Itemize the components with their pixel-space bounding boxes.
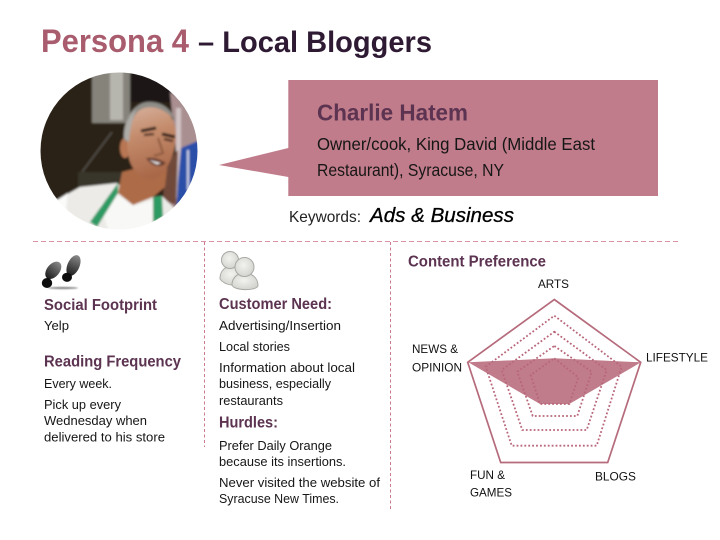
data shape	[468, 358, 641, 404]
keywords: Ads & Business	[369, 205, 514, 227]
radar axis labels: FUN &	[470, 468, 505, 482]
persona role: Restaurant), Syracuse, NY	[317, 160, 504, 180]
persona role: Owner/cook, King David (Middle East	[317, 134, 595, 154]
panel: customer need and hurdles	[219, 296, 380, 506]
heading: customer need: Customer Need:	[219, 296, 332, 313]
heading: reading frequency: Reading Frequency	[44, 354, 181, 370]
text: reading frequency details: delivered to his store	[44, 430, 165, 444]
ear	[120, 138, 130, 158]
text: hurdles list: Never visited the website of	[219, 475, 380, 490]
title: – Local Bloggers	[198, 26, 432, 59]
nose	[154, 138, 163, 156]
photo: Charlie Hatem portrait	[40, 72, 198, 230]
icon: footprints	[42, 253, 83, 289]
text: reading frequency details: Pick up every	[44, 397, 121, 412]
heading: hurdles: Hurdles:	[219, 414, 278, 432]
text: hurdles list: Prefer Daily Orange	[219, 438, 332, 453]
persona role	[317, 134, 595, 180]
radar chart	[412, 277, 708, 500]
text: customer need list: Information about local	[219, 360, 355, 375]
radar axis labels: LIFESTYLE	[646, 350, 708, 364]
heading: content preference: Content Preference	[408, 254, 546, 270]
text: customer need list: Advertising/Insertion	[219, 318, 341, 333]
text: social footprint value: Yelp	[44, 318, 69, 333]
background plaid	[168, 91, 197, 208]
neck	[118, 160, 168, 205]
keywords	[289, 205, 514, 227]
panel: content preference	[408, 254, 708, 500]
radar axis labels: OPINION	[412, 360, 462, 374]
heading: social footprint: Social Footprint	[44, 297, 158, 314]
apron straps	[90, 183, 118, 227]
persona name: Charlie Hatem	[317, 100, 468, 126]
radar axis labels: GAMES	[470, 486, 512, 500]
hair	[124, 102, 176, 142]
radar axis labels	[412, 277, 708, 500]
text: hurdles list: Syracuse New Times.	[219, 491, 339, 506]
title: Persona 4	[41, 23, 189, 59]
shirt	[64, 181, 174, 229]
text: reading frequency details: Wednesday when	[44, 413, 147, 428]
brows and eyes	[141, 128, 175, 137]
text: reading frequency details: Every week.	[44, 376, 112, 391]
mouth	[146, 158, 166, 166]
callout: persona name and role	[219, 80, 658, 196]
icon: people	[220, 252, 258, 290]
radar axis labels: BLOGS	[595, 470, 636, 484]
text: customer need list: Local stories	[219, 339, 290, 354]
text: hurdles list	[219, 438, 380, 506]
keywords: Keywords:	[289, 209, 361, 226]
text: customer need list: restaurants	[219, 393, 283, 408]
text: reading frequency details	[44, 376, 165, 444]
text: hurdles list: because its insertions.	[219, 454, 346, 469]
radar axis labels: ARTS	[538, 277, 569, 291]
face	[126, 106, 176, 172]
panel: social footprint and reading frequency	[44, 297, 181, 444]
text: customer need list: business, especially	[219, 376, 331, 391]
text: customer need list	[219, 318, 355, 408]
title	[41, 23, 432, 59]
radar axis labels: NEWS &	[412, 342, 458, 356]
